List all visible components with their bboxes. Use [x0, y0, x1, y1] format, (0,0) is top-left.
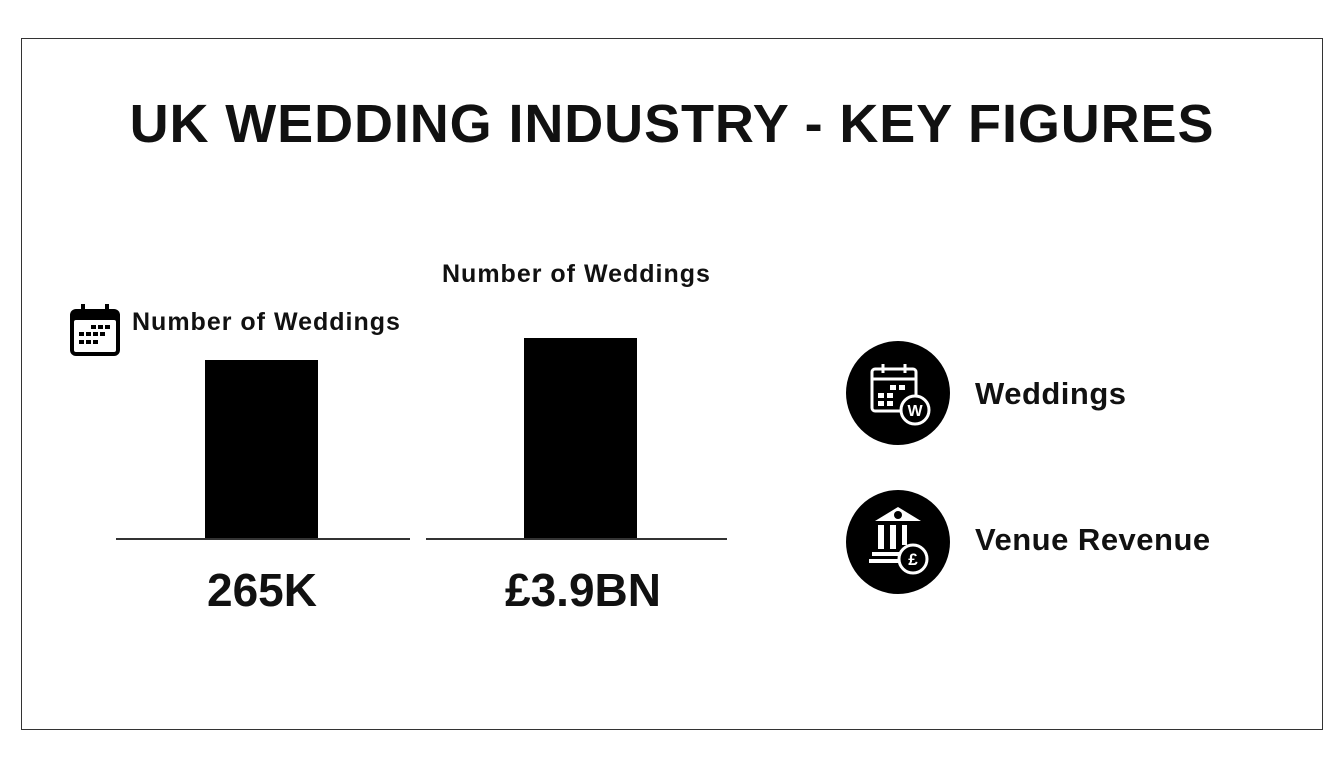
label: weddings: Weddings	[975, 376, 1127, 411]
icon: weddings	[846, 341, 950, 445]
label: bar 1: Number of Weddings	[132, 308, 401, 336]
label: venue revenue: Venue Revenue	[975, 522, 1211, 557]
icon: calendar small	[70, 304, 120, 356]
value 2: £3.9BN	[505, 564, 661, 616]
bar chart 1	[116, 360, 410, 540]
value 1: 265K	[207, 564, 317, 616]
icon: venue revenue	[846, 490, 950, 594]
icon: weddings: W	[907, 403, 923, 420]
label: bar 2: Number of Weddings	[442, 260, 711, 288]
title: UK WEDDING INDUSTRY - KEY FIGURES	[130, 94, 1214, 154]
icon: venue revenue: £	[908, 550, 918, 569]
bar chart 2	[426, 338, 727, 540]
